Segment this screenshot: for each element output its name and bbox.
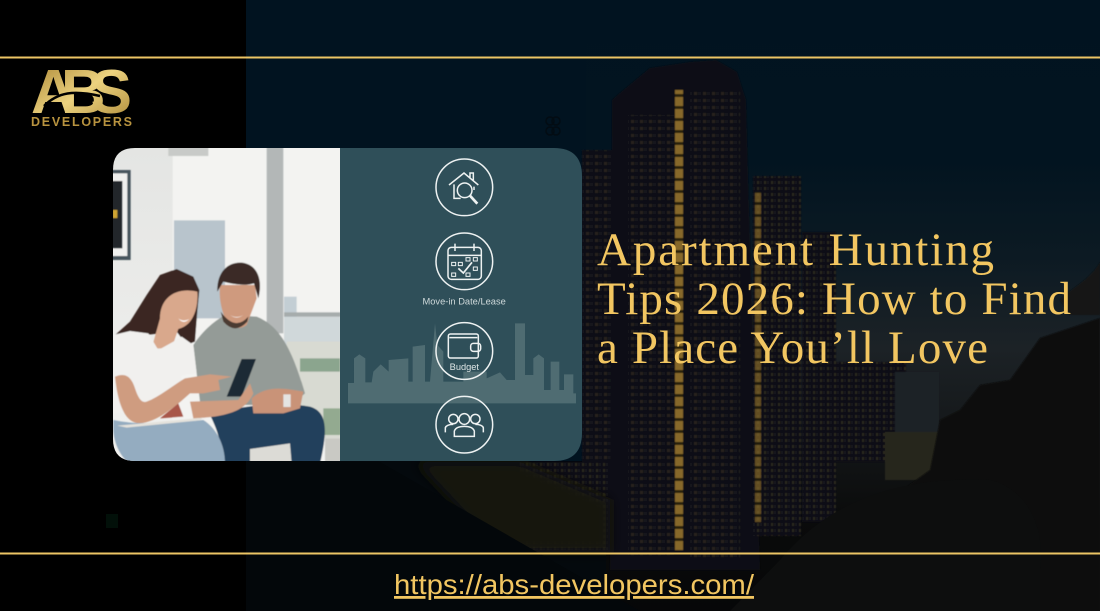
- small decorative mark: [546, 117, 560, 135]
- logo: ABS Developers: DEVELOPERS: [31, 115, 132, 129]
- window: [173, 147, 343, 463]
- sofa: [250, 443, 292, 461]
- label: move-in date: Move-in Date/Lease: [422, 296, 506, 306]
- teal tips panel: [340, 148, 582, 461]
- icon: calendar: [436, 233, 493, 290]
- photo panel: couple on sofa: [110, 147, 343, 463]
- bottom gold rule: [0, 552, 1100, 554]
- website link: https://abs-developers.com/: [394, 569, 754, 600]
- wall frame: [110, 170, 131, 260]
- woman: [113, 269, 199, 345]
- towers: [520, 60, 955, 570]
- logo: ABS Developers: ABS: [31, 58, 132, 127]
- icon: wallet: [436, 323, 493, 379]
- icon: house with magnifier: [436, 159, 493, 216]
- hillside and trees: [760, 318, 1100, 611]
- phone: [227, 359, 256, 397]
- background: night city: [246, 0, 1100, 611]
- top gold rule: [0, 56, 1100, 58]
- left black band: [0, 0, 246, 611]
- title: Tips 2026: How to Find: [597, 273, 1071, 325]
- title: Apartment Hunting: [597, 224, 994, 276]
- icon: people group: [436, 396, 493, 453]
- skyline silhouette: [348, 323, 576, 403]
- title: a Place You’ll Love: [597, 322, 988, 374]
- label: budget: Budget: [450, 362, 479, 372]
- foreground road shapes: [246, 461, 640, 611]
- lit ground: [415, 462, 610, 552]
- man: [193, 315, 305, 405]
